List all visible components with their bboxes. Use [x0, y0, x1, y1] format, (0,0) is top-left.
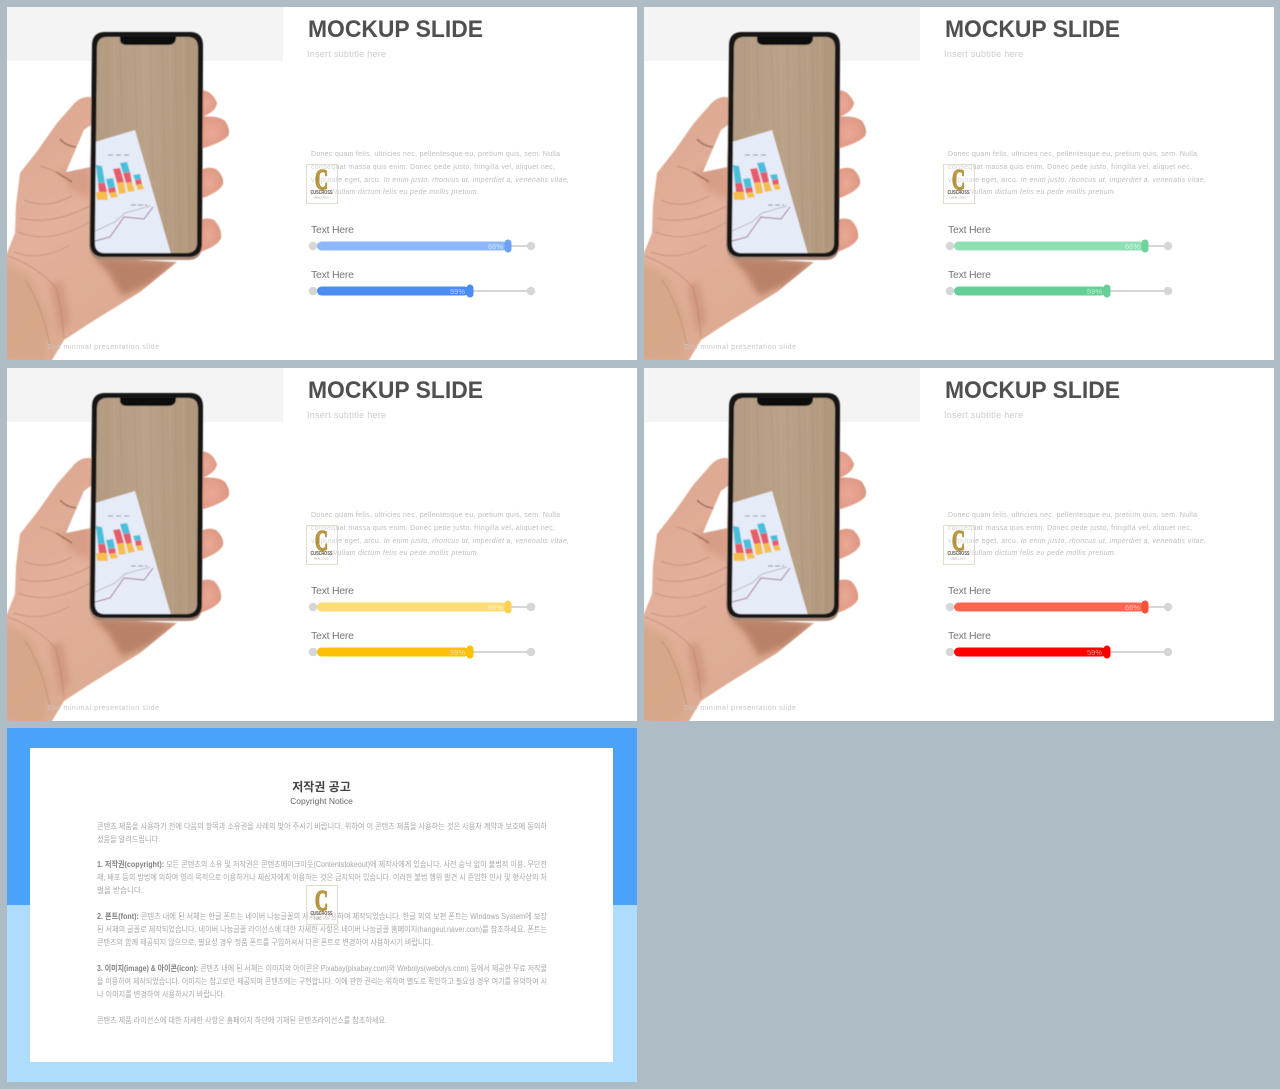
progress bar 1: Text Here: [948, 224, 991, 236]
title: MOCKUP SLIDE: [945, 16, 1120, 43]
body text: consequat massa quis enim. Donec pede justo, fringilla vel, aliquet nec,: [311, 164, 555, 171]
slide 2: green mockup: [639, 7, 1274, 365]
slide 4: red mockup: [639, 368, 1274, 726]
body text: [947, 151, 1206, 196]
watermark logo: CUSCROSS: [310, 190, 333, 196]
progress bar 2: [309, 269, 535, 298]
body text: Donec quam felis, ultricies nec, pellentesque eu, pretium quis, sem. Nulla: [311, 151, 560, 158]
notice title: 저작권 공고: [292, 779, 351, 794]
subtitle: Insert subtitle here: [307, 49, 386, 59]
progress bar 2: [946, 630, 1172, 658]
watermark logo: REAL LOGO: [314, 558, 329, 560]
body text: vulputate eget, arcu. In enim justo, rhoncus ut, imperdiet a, venenatis vitae,: [311, 177, 569, 184]
subtitle: Insert subtitle here: [944, 410, 1023, 420]
body text: Donec quam felis, ultricies nec, pellentesque eu, pretium quis, sem. Nulla: [948, 151, 1197, 158]
watermark logo: C: [952, 526, 965, 557]
body text: Donec quam felis, ultricies nec, pellentesque eu, pretium quis, sem. Nulla: [948, 512, 1197, 519]
hand holding phone: [639, 32, 866, 365]
section 2: font: 콘텐츠의 함께 제공되지 않으므로, 필요성 경우 정품 폰트를 구입하셔서 다른 폰트로 변경하여 사용하시기 바랍니다.: [97, 937, 433, 947]
progress bar 2: Text Here: [311, 630, 354, 642]
watermark logo: [306, 526, 338, 564]
footer note: Zoo minimal presentation slide: [47, 344, 159, 351]
body text: justo. Nullam dictum felis eu pede mollis pretium.: [947, 189, 1116, 196]
footer note: Zoo minimal presentation slide: [684, 344, 796, 351]
progress bar 2: [309, 630, 535, 658]
body text: [310, 512, 569, 557]
hand holding phone: [639, 393, 866, 726]
section 3: image and icon: 을 이용하여 제작되었습니다. 이미지는 참고로만 제공되며 콘텐츠에는 구현합니다. 이에 관한 권리는 위하여 별도로 확인하고 필요성 경우 여기를 유의하여 시: [97, 976, 547, 986]
watermark logo: CUSCROSS: [948, 551, 970, 557]
progress bar 2: Text Here: [948, 630, 991, 642]
footer note: Zoo minimal presentation slide: [684, 705, 796, 712]
section 1: copyright: 벌을 받습니다.: [97, 885, 143, 895]
intro paragraph: 콘텐츠 제품을 사용하기 전에 다음의 항목과 소유권을 사례의 맞아 주시기 바랍니다. 위하여 이 콘텐츠 제품을 사용하는 것은 사용자 계약과 보호에 동의하: [97, 821, 548, 831]
progress bar 2: Text Here: [311, 269, 354, 281]
title: MOCKUP SLIDE: [308, 377, 483, 404]
watermark logo: CUSCROSS: [948, 190, 970, 196]
slide 1: blue mockup: [2, 7, 637, 365]
progress bar 2: 59%: [450, 287, 465, 296]
progress bar 1: Text Here: [948, 585, 991, 597]
watermark logo: [944, 164, 974, 204]
section 2: font: 된 서체의 글꼴로 제작되었습니다. 네이버 나눔글꼴 라이선스에 대한 자세한 사항은 네이버 나눔글꼴 홈페이지(hangeul.naver.com)를 참조하세요. 폰트는: [97, 924, 547, 934]
body text: [310, 151, 569, 196]
body text: Donec quam felis, ultricies nec, pellentesque eu, pretium quis, sem. Nulla: [311, 512, 560, 519]
slide 3: yellow mockup: [2, 368, 637, 726]
hand holding phone: [2, 32, 229, 365]
progress bar 1: [309, 585, 535, 614]
progress bar 2: [946, 269, 1172, 298]
progress bar 1: [309, 224, 535, 252]
progress bar 1: Text Here: [311, 585, 354, 597]
progress bar 2: 59%: [1087, 648, 1102, 657]
notice subtitle: Copyright Notice: [290, 796, 353, 806]
progress bar 1: [946, 585, 1172, 614]
body text: consequat massa quis enim. Donec pede justo, fringilla vel, aliquet nec,: [311, 525, 555, 532]
watermark logo: CUSCROSS: [310, 551, 333, 557]
progress bar 1: Text Here: [311, 224, 354, 236]
slide 5: copyright notice: [7, 728, 637, 1082]
section 3: image and icon: 3. 이미지(image) & 아이콘(icon): 콘텐츠 내에 된 서체는 이미지와 아이콘은 Pixabay(pixabay.com)와 Webolys(webolys.com) 등에서 제공한 무료 저작물: [97, 963, 547, 973]
watermark logo: C: [952, 165, 965, 196]
watermark logo: [306, 164, 338, 204]
subtitle: Insert subtitle here: [944, 49, 1023, 59]
progress bar 2: 59%: [1087, 287, 1102, 296]
hand holding phone: [2, 393, 229, 726]
header band: [7, 368, 283, 422]
watermark logo: C: [315, 165, 328, 196]
body text: vulputate eget, arcu. In enim justo, rhoncus ut, imperdiet a, venenatis vitae,: [948, 538, 1206, 545]
intro paragraph: 셨음을 알려드립니다.: [97, 834, 160, 844]
section 2: font: 2. 폰트(font): 콘텐츠 내에 된 서체는 한글 폰트는 네이버 나눔글꼴의 서체를 사용하여 제작되었습니다. 한글 외의 보편 폰트는 Windows System에 보장: [97, 911, 548, 921]
watermark logo: REAL LOGO: [314, 918, 329, 920]
body text: justo. Nullam dictum felis eu pede mollis pretium.: [310, 550, 479, 557]
progress bar 1: 66%: [1125, 603, 1140, 612]
section 3: image and icon: [97, 963, 547, 999]
intro paragraph: [97, 821, 548, 844]
section 1: copyright: [97, 859, 547, 895]
section 1: copyright: 1. 저작권(copyright): 모든 콘텐츠의 소유 및 저작권은 콘텐츠메이크아웃(Contentstokeout)에 제작사에게 있습니다. 사전 승낙 없이 불법적 이용, 무단전: [97, 859, 547, 869]
body text: vulputate eget, arcu. In enim justo, rhoncus ut, imperdiet a, venenatis vitae,: [948, 177, 1206, 184]
progress bar 1: 66%: [488, 603, 503, 612]
license note: 콘텐츠 제품 라이선스에 대한 자세한 사항은 홈페이지 하단에 기재된 콘텐츠라이선스를 참조하세요.: [97, 1015, 387, 1025]
title: MOCKUP SLIDE: [945, 377, 1120, 404]
title: MOCKUP SLIDE: [308, 16, 483, 43]
progress bar 1: 66%: [488, 242, 503, 251]
body text: justo. Nullam dictum felis eu pede mollis pretium.: [310, 189, 479, 196]
body text: [947, 512, 1206, 557]
watermark logo: REAL LOGO: [314, 196, 329, 200]
subtitle: Insert subtitle here: [307, 410, 386, 420]
watermark logo: REAL LOGO: [951, 558, 966, 560]
header band: [7, 7, 283, 61]
watermark logo: C: [315, 526, 328, 557]
watermark logo: REAL LOGO: [951, 196, 966, 200]
watermark logo: CUSCROSS: [310, 911, 333, 917]
body text: consequat massa quis enim. Donec pede justo, fringilla vel, aliquet nec,: [948, 525, 1192, 532]
header band: [644, 7, 920, 61]
section 1: copyright: 재, 배포 등의 방법에 의하여 영리 목적으로 이용하거나 제삼자에게 이용하는 것은 금지되어 있습니다. 이러한 불법 행위 발견 시 준엄한 민사 및 형사상의 처: [97, 872, 547, 882]
section 3: image and icon: 나 이미지를 변경하여 사용하시기 바랍니다.: [97, 989, 225, 999]
progress bar 1: [946, 224, 1172, 252]
watermark logo: [944, 526, 974, 564]
footer note: Zoo minimal presentation slide: [47, 705, 159, 712]
body text: justo. Nullam dictum felis eu pede mollis pretium.: [947, 550, 1116, 557]
header band: [644, 368, 920, 422]
watermark logo: [306, 886, 338, 924]
progress bar 1: 66%: [1125, 242, 1140, 251]
progress bar 2: 59%: [450, 648, 465, 657]
body text: vulputate eget, arcu. In enim justo, rhoncus ut, imperdiet a, venenatis vitae,: [311, 538, 569, 545]
body text: consequat massa quis enim. Donec pede justo, fringilla vel, aliquet nec,: [948, 164, 1192, 171]
progress bar 2: Text Here: [948, 269, 991, 281]
section 2: font: [97, 911, 548, 947]
notice card: [30, 748, 613, 1062]
watermark logo: C: [315, 886, 328, 917]
